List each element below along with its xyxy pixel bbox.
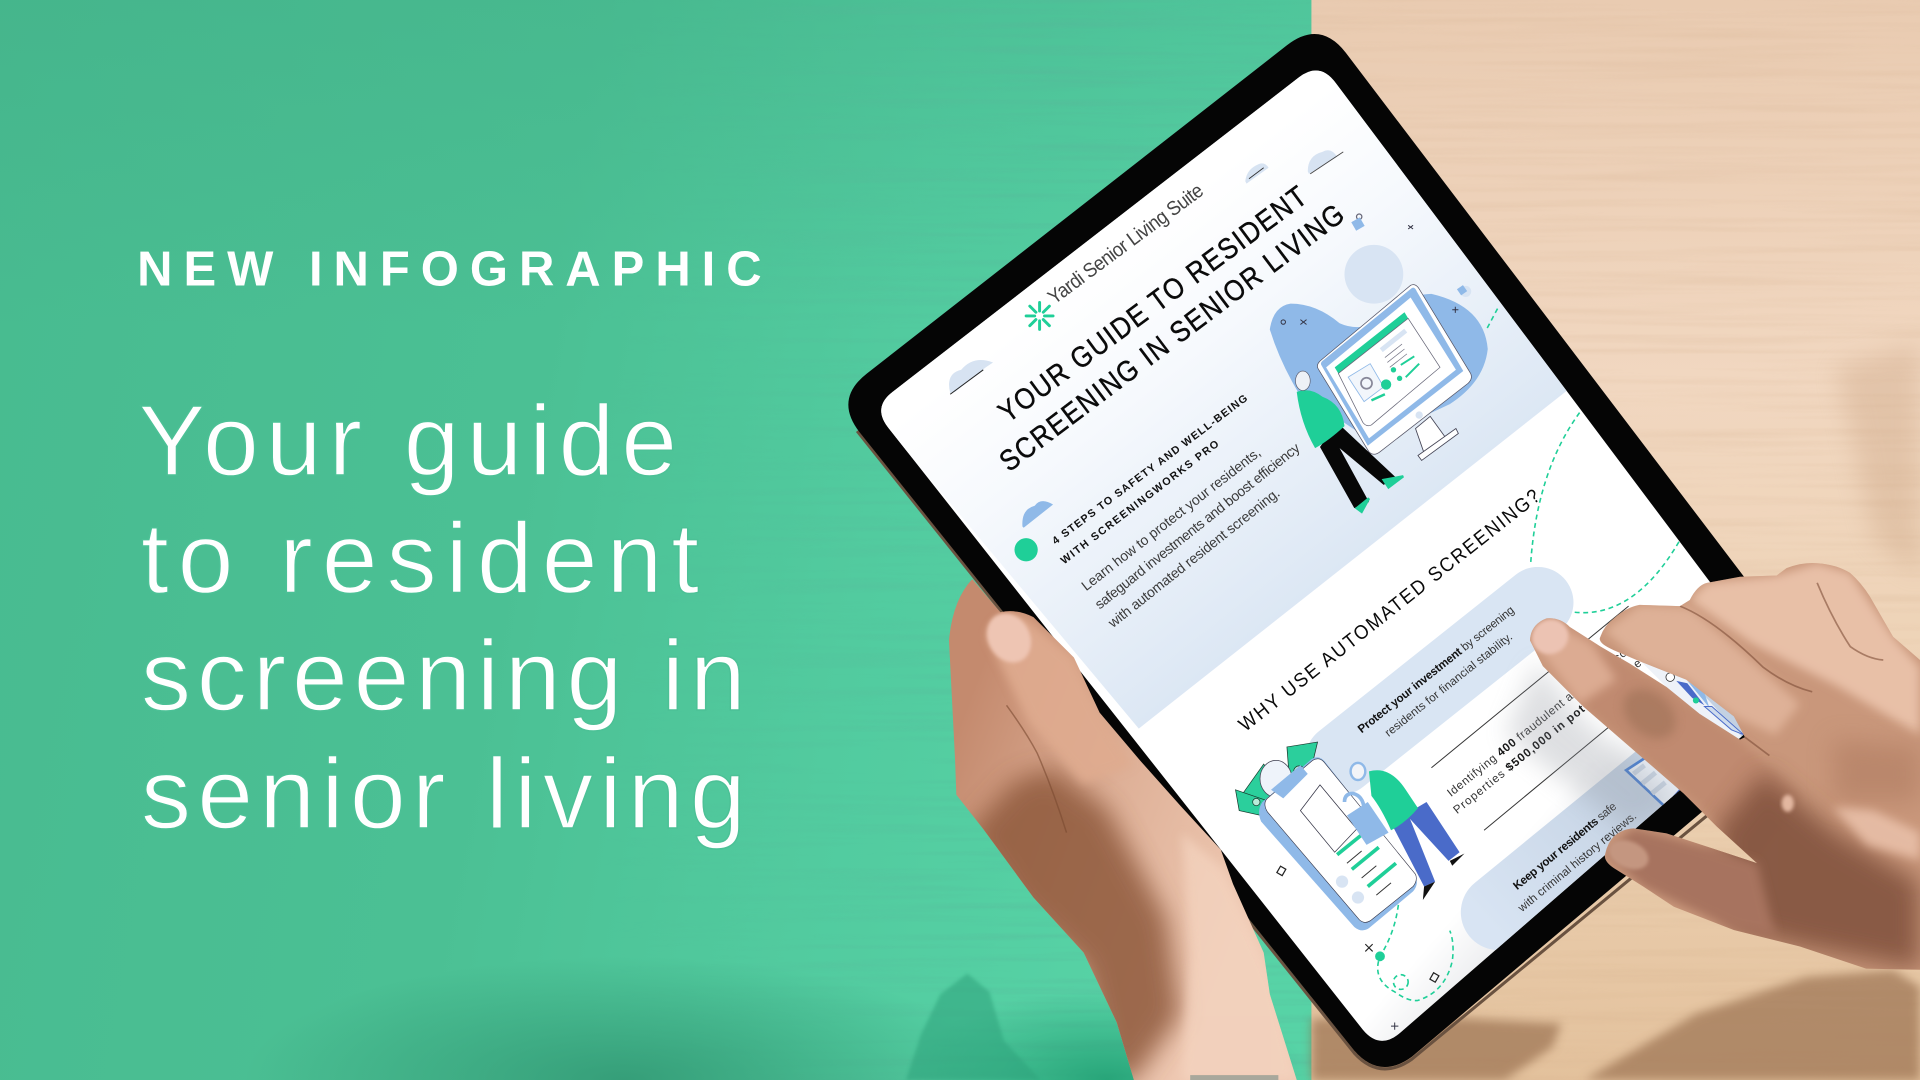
dashed connector lines	[1378, 309, 1680, 1001]
subtitle: WITH SCREENINGWORKS PRO	[1059, 438, 1221, 567]
left hand wrist and palm shadow	[967, 768, 1180, 1080]
benefit text: protect: residents for financial stability.	[1382, 630, 1515, 739]
tablet bezel	[848, 34, 1823, 1067]
heading: new infographic: NEW INFOGRAPHIC	[137, 242, 762, 296]
benefit text: protect: Protect your investment by screening	[1355, 604, 1517, 736]
illustration: person with padlock	[1344, 763, 1464, 900]
title: your guide to resident screening in senior living: Your guide	[138, 385, 677, 497]
pale circle	[1344, 245, 1403, 304]
table shadow: under hand	[1584, 970, 1920, 1080]
illustration: magnifier circle	[1260, 760, 1292, 797]
illustration: phone with document	[1259, 757, 1417, 930]
title: your guide to resident screening in senior living: senior living	[141, 738, 746, 850]
bracelet	[1190, 1075, 1278, 1080]
green bullet	[1014, 538, 1038, 561]
right index fingertip nail	[1526, 613, 1574, 660]
benefit pill: protect	[1341, 602, 1538, 759]
person at monitor	[1296, 371, 1403, 512]
monitor check badge	[1381, 379, 1391, 390]
index fingertip tone	[1531, 618, 1616, 704]
left thumbnail	[978, 605, 1040, 671]
table shadow: near tablet corner	[1311, 1016, 1561, 1080]
right thumb nail	[1604, 834, 1653, 875]
small lock icon	[1351, 214, 1365, 231]
panel: green background	[0, 0, 1311, 1080]
benefit pill: keep residents safe	[1499, 716, 1739, 912]
divider line 1	[1431, 606, 1629, 768]
body text: with automated resident screening.	[1104, 485, 1283, 631]
back of hand shadow	[1714, 771, 1920, 970]
ring and pinky fingers	[1690, 563, 1920, 735]
divider line 2	[1484, 725, 1611, 830]
clouds	[949, 150, 1343, 528]
laptop illustration	[1626, 757, 1681, 807]
finger creases	[1680, 583, 1883, 756]
logo text: Yardi Senior Living Suite	[1044, 180, 1208, 309]
subtitle: 4 STEPS TO SAFETY AND WELL-BEING	[1050, 393, 1250, 547]
benefit text: identifying: Properties $500,000 in potential losses	[1451, 652, 1649, 817]
benefit text: keep residents safe: Keep your residents safe	[1511, 800, 1619, 893]
benefit text: identifying: Identifying 400 fraudulent applicants could save	[1445, 616, 1667, 799]
monitor content lines	[1371, 331, 1423, 419]
shadow cast by finger on screen	[1506, 661, 1684, 833]
body text: safeguard investments and boost efficiency	[1091, 439, 1303, 612]
small figure seen between fingers	[1642, 662, 1744, 739]
left thumb	[987, 615, 1133, 784]
tablet screen	[881, 70, 1744, 1041]
panel: wood table background	[1311, 0, 1920, 1080]
tablet rim highlight	[857, 431, 1811, 1069]
title: your guide to resident screening in senior living	[138, 385, 746, 850]
title: your guide to resident screening in senior living: screening in	[141, 620, 746, 732]
illustration: money notes	[1236, 742, 1318, 816]
small decorations	[1281, 225, 1458, 324]
index knuckle shade	[1613, 679, 1685, 749]
upper screen panel	[881, 70, 1567, 728]
monitor document	[1348, 364, 1384, 402]
left hand lit area	[1182, 833, 1298, 1080]
middle finger	[1604, 605, 1800, 735]
back of hand upper shade	[1833, 740, 1920, 802]
blue blob	[1270, 294, 1488, 441]
monitor panel outline	[1338, 318, 1440, 426]
index finger	[1531, 618, 1800, 857]
tablet title: SCREENING IN SENIOR LIVING	[993, 197, 1350, 478]
tablet title: YOUR GUIDE TO RESIDENT	[992, 179, 1313, 429]
hand: left hand holding tablet	[949, 579, 1298, 1080]
small blue square	[1457, 285, 1471, 297]
heading: why use automated screening: WHY USE AUTOMATED SCREENING?	[1235, 485, 1544, 736]
sunlit streak on back of hand	[1833, 807, 1920, 860]
monitor	[1317, 285, 1471, 454]
title: your guide to resident screening in senior living: to resident	[141, 503, 699, 615]
monitor header bar	[1335, 312, 1408, 373]
sunlit knuckle spot	[1782, 795, 1794, 812]
thumb	[1605, 828, 1776, 937]
logo: Yardi spark	[1026, 302, 1053, 329]
monitor stand	[1416, 416, 1458, 460]
body text: Learn how to protect your residents,	[1078, 444, 1264, 594]
benefit text: keep residents safe: with criminal history reviews.	[1515, 810, 1639, 915]
tablet device	[848, 34, 1823, 1069]
decorations: bottom	[1277, 866, 1439, 1030]
hand: right hand touching tablet	[1526, 563, 1920, 970]
